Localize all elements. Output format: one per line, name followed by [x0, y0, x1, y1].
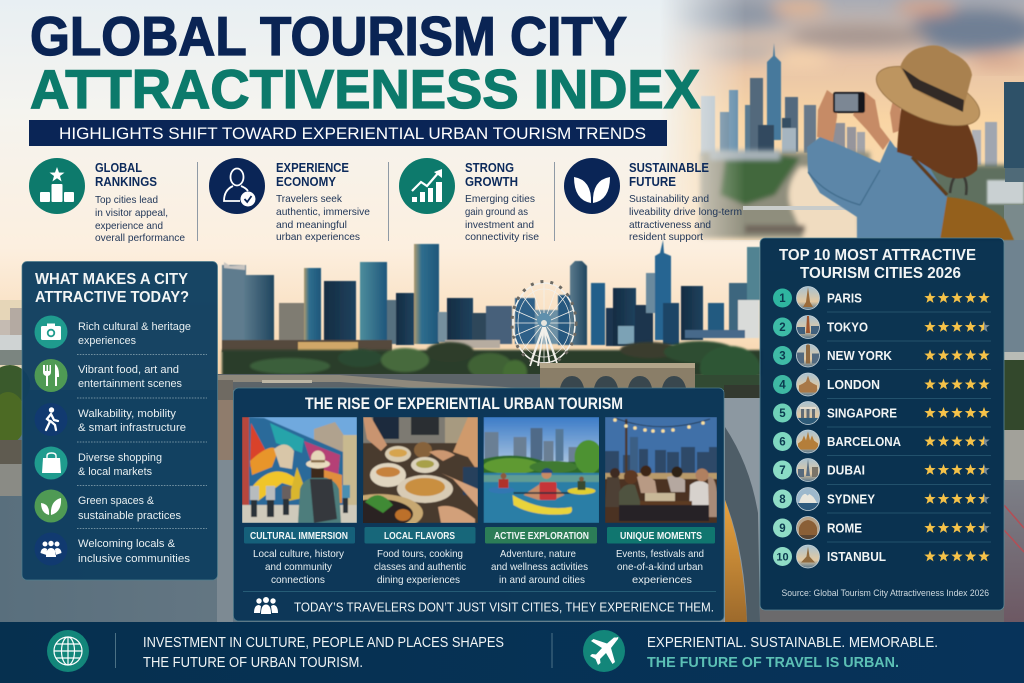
description: local flavors: Food tours, cooking — [377, 548, 463, 560]
source note: Source: Global Tourism City Attractiveness Index 2026 — [782, 588, 989, 599]
row 2: Tokyo: TOKYO — [827, 320, 868, 334]
item: culture: Rich cultural & heritage — [78, 321, 191, 333]
subtitle banner — [29, 120, 667, 146]
feature: experience economy: ECONOMY — [276, 175, 337, 189]
description: local flavors: classes and authentic — [374, 561, 466, 573]
item: shopping: & local markets — [78, 466, 152, 478]
description: local flavors: dining experiences — [377, 574, 460, 586]
icon: growth chart — [399, 158, 455, 214]
feature: experience economy: urban experiences — [276, 231, 360, 243]
icon: people — [34, 532, 68, 566]
row 10: Istanbul — [773, 544, 990, 568]
row 5: Singapore: SINGAPORE — [827, 406, 897, 420]
row 8: Sydney: SYDNEY — [827, 492, 876, 506]
face — [890, 100, 902, 133]
tag: local flavors: LOCAL FLAVORS — [384, 530, 455, 542]
description: cultural immersion — [253, 548, 345, 586]
tag: active exploration — [485, 527, 597, 544]
icon: podium with star — [29, 158, 85, 214]
item: shopping: Diverse shopping — [78, 452, 162, 464]
feature: sustainable future — [564, 158, 742, 243]
photo: street mural — [242, 417, 357, 523]
row 4: London: 4 — [779, 380, 786, 392]
row 4: London — [773, 372, 990, 396]
tourist photographing the skyline — [807, 45, 1014, 240]
description: unique moments — [616, 548, 704, 586]
description: cultural immersion: and community — [265, 561, 333, 573]
feature: sustainable future: liveability drive long-term — [629, 206, 742, 218]
row 2: Tokyo: 2 — [779, 322, 786, 334]
straw hat — [868, 45, 988, 138]
description: local flavors — [374, 548, 466, 586]
item: green spaces: sustainable practices — [78, 510, 181, 522]
tag: cultural immersion — [244, 527, 355, 544]
feature: strong growth: Emerging cities — [465, 193, 535, 205]
feature: strong growth: STRONG — [465, 161, 514, 175]
feature: global rankings: overall performance — [95, 232, 185, 244]
tag: local flavors — [364, 527, 476, 544]
footer message: investment — [143, 635, 504, 671]
icon: leaf — [34, 490, 68, 522]
row 7: Dubai: 7 — [779, 465, 786, 477]
sunset sky, skyline and river top right, faded toward the title — [640, 0, 1024, 240]
tag: unique moments — [607, 527, 715, 544]
feature: global rankings: in visitor appeal, — [95, 207, 168, 219]
icon: shopping bag — [34, 446, 68, 480]
item: walkability — [34, 403, 186, 436]
icon: travelers group — [254, 597, 278, 614]
item: community: Welcoming locals & — [78, 538, 176, 550]
feature: sustainable future: attractiveness and — [629, 219, 711, 231]
feature: strong growth: GROWTH — [465, 175, 518, 189]
icon: airplane — [583, 630, 625, 672]
feature: strong growth: investment and — [465, 219, 534, 231]
feature: global rankings: Top cities lead — [95, 194, 158, 206]
footer bar — [0, 622, 1024, 683]
ferris wheel — [512, 282, 576, 366]
item: green spaces — [34, 490, 181, 522]
feature: strong growth — [399, 158, 539, 243]
row 9: Rome: 9 — [779, 523, 786, 535]
closing statement: TODAY’S TRAVELERS DON’T JUST VISIT CITIES, THEY EXPERIENCE THEM. — [294, 600, 714, 614]
feature: global rankings: GLOBAL — [95, 161, 142, 175]
row 6: Barcelona: BARCELONA — [827, 435, 901, 449]
panel: the rise of experiential urban tourism: THE RISE OF EXPERIENTIAL URBAN TOURISM — [305, 395, 623, 413]
row 4: London: LONDON — [827, 378, 880, 392]
footer message: future of travel: EXPERIENTIAL. SUSTAINABLE. MEMORABLE. — [647, 635, 938, 651]
panel: the rise of experiential urban tourism — [234, 388, 724, 621]
phone — [833, 92, 865, 113]
description: unique moments: one-of-a-kind urban — [617, 561, 703, 573]
tree band — [222, 341, 762, 390]
description: cultural immersion: Local culture, history — [253, 548, 345, 560]
row 1: Paris: 1 — [779, 293, 786, 305]
footer message: investment: THE FUTURE OF URBAN TOURISM. — [143, 655, 363, 671]
item: community — [34, 532, 191, 566]
photo: local food table — [363, 417, 478, 523]
item: culture: experiences — [78, 335, 136, 347]
description: unique moments: experiences — [632, 574, 692, 586]
item: community: inclusive communities — [78, 553, 191, 565]
item: food — [34, 359, 182, 392]
feature: global rankings: RANKINGS — [95, 175, 157, 189]
backpack strap — [912, 157, 947, 195]
row 8: Sydney — [773, 487, 990, 511]
footer message: future of travel — [647, 635, 938, 671]
footer message: investment: INVESTMENT IN CULTURE, PEOPLE AND PLACES SHAPES — [143, 635, 504, 651]
feature: experience economy: Travelers seek — [276, 193, 343, 205]
row 3: New York: 3 — [779, 350, 786, 362]
item: walkability: & smart infrastructure — [78, 422, 186, 434]
skin: forearms and hands — [817, 90, 837, 142]
feature: sustainable future: Sustainability and — [629, 193, 709, 205]
description: active exploration: Adventure, nature — [500, 548, 576, 560]
feature: global rankings: experience and — [95, 220, 163, 232]
row 9: Rome: ROME — [827, 522, 862, 536]
panel: what makes a city attractive — [22, 262, 218, 580]
description: active exploration: in and around cities — [499, 574, 585, 586]
icon: globe — [47, 630, 89, 672]
row 9: Rome — [773, 516, 990, 540]
panel: what makes a city attractive: WHAT MAKES A CITY — [35, 271, 189, 288]
icon: walking person — [34, 403, 68, 436]
title: ATTRACTIVENESS INDEX — [30, 58, 700, 120]
row 8: Sydney: 8 — [779, 494, 786, 506]
icon: person with check — [209, 158, 265, 214]
row 2: Tokyo — [773, 315, 990, 339]
photo: kayaks on a city lake — [484, 417, 599, 523]
description: unique moments: Events, festivals and — [616, 548, 704, 560]
feature: experience economy: authentic, immersive — [276, 206, 370, 218]
row 3: New York: NEW YORK — [827, 349, 892, 363]
row 1: Paris — [773, 286, 990, 310]
midground skyline — [222, 240, 760, 352]
description: active exploration: and wellness activities — [491, 561, 588, 573]
panel: top 10 ranking: TOP 10 MOST ATTRACTIVE — [779, 247, 976, 264]
icon: fork and knife — [34, 359, 68, 392]
row 10: Istanbul: ISTANBUL — [827, 550, 886, 564]
feature: global rankings — [29, 158, 185, 244]
row 1: Paris: PARIS — [827, 292, 862, 306]
row 6: Barcelona: 6 — [779, 436, 786, 448]
ground, water and left waterfront — [0, 240, 1024, 625]
feature: strong growth: gain ground as — [465, 206, 528, 218]
feature: sustainable future: resident support — [629, 231, 703, 243]
tag: unique moments: UNIQUE MOMENTS — [620, 530, 702, 542]
item: culture — [34, 316, 191, 348]
item: shopping — [34, 446, 162, 480]
item: food: entertainment scenes — [78, 378, 182, 390]
icon: camera — [34, 316, 68, 348]
description: active exploration — [491, 548, 588, 586]
feature: experience economy: and meaningful — [276, 219, 347, 231]
row 7: Dubai — [773, 458, 990, 482]
feature: experience economy — [209, 158, 370, 243]
row 6: Barcelona — [773, 430, 990, 454]
item: walkability: Walkability, mobility — [78, 408, 177, 420]
title — [30, 5, 700, 120]
tag: active exploration: ACTIVE EXPLORATION — [494, 530, 589, 542]
row 5: Singapore: 5 — [779, 408, 786, 420]
icon: leaves — [564, 158, 620, 214]
row 7: Dubai: DUBAI — [827, 464, 865, 478]
item: green spaces: Green spaces & — [78, 495, 155, 507]
description: cultural immersion: connections — [271, 574, 325, 586]
row 5: Singapore — [773, 401, 990, 425]
backpack — [930, 197, 1014, 240]
title: GLOBAL TOURISM CITY — [30, 5, 627, 67]
subtitle banner: HIGHLIGHTS SHIFT TOWARD EXPERIENTIAL URBAN TOURISM TRENDS — [59, 124, 646, 143]
row 10: Istanbul: 10 — [776, 552, 789, 564]
feature: strong growth: connectivity rise — [465, 231, 539, 243]
panel: what makes a city attractive: ATTRACTIVE TODAY? — [35, 289, 189, 306]
panel: top 10 ranking — [760, 238, 1004, 610]
feature: sustainable future: FUTURE — [629, 175, 676, 189]
feature: experience economy: EXPERIENCE — [276, 161, 349, 175]
hair — [897, 103, 978, 178]
feature: sustainable future: SUSTAINABLE — [629, 161, 709, 175]
footer message: future of travel: THE FUTURE OF TRAVEL IS URBAN. — [647, 655, 899, 671]
photo: dinner under string lights — [605, 417, 717, 523]
tag: cultural immersion: CULTURAL IMMERSION — [250, 530, 348, 542]
item: food: Vibrant food, art and — [78, 364, 179, 376]
row 3: New York — [773, 344, 990, 368]
denim jacket — [807, 137, 947, 240]
river promenade and bridge — [217, 363, 760, 395]
panel: top 10 ranking: TOURISM CITIES 2026 — [800, 265, 961, 282]
